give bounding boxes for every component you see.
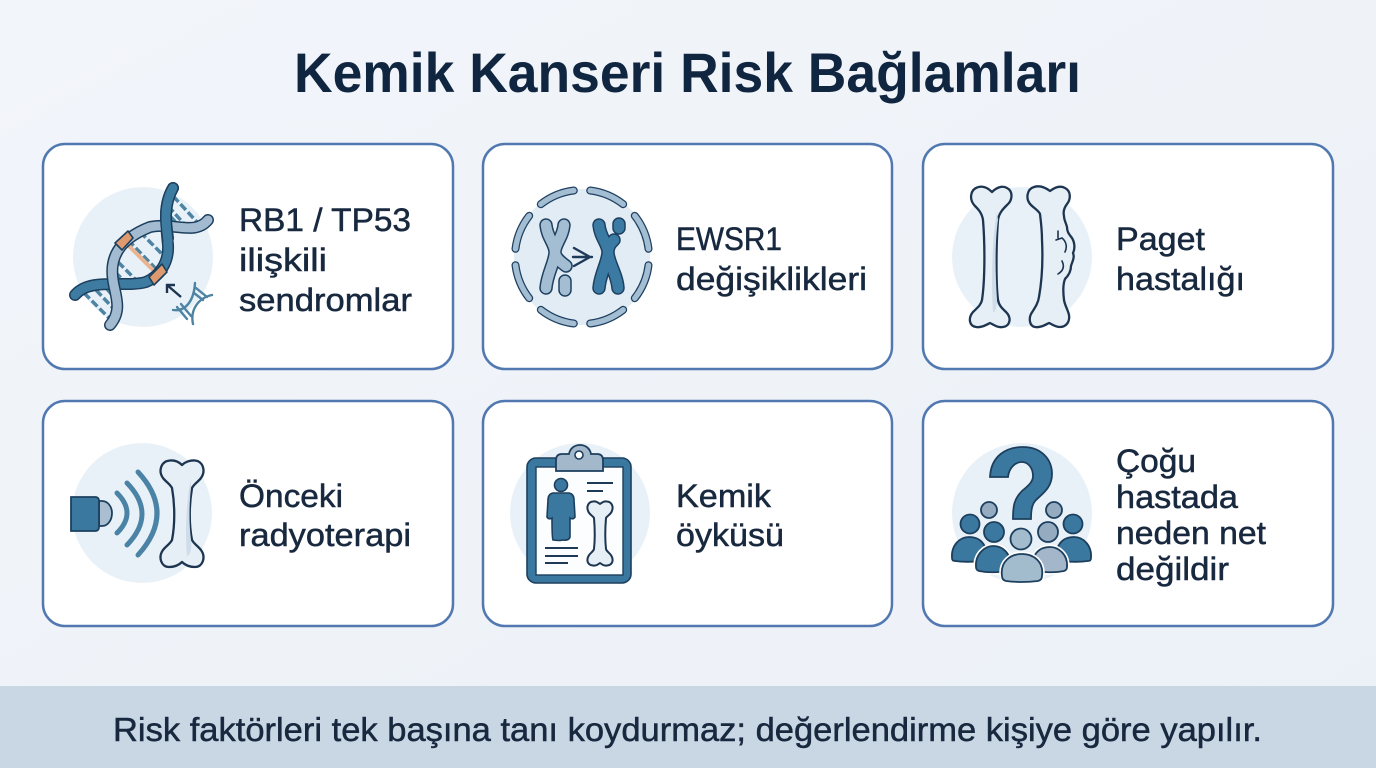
label: Paget: [1116, 221, 1205, 257]
icon: DNA helix: [73, 187, 213, 327]
panel: cause unclear in most patients: [923, 401, 1333, 626]
icon: clipboard: [510, 443, 650, 583]
label: hastada: [1116, 479, 1239, 515]
footer banner: Risk faktörleri tek başına tanı koydurmaz; değerlendirme kişiye göre yapılır.: [113, 711, 1262, 748]
label: Önceki: [239, 478, 343, 514]
label: Kemik: [676, 478, 772, 514]
label: [239, 478, 411, 553]
icon: radiation source and bone: [71, 443, 212, 583]
icon: question mark and people: [952, 443, 1092, 583]
small DNA: [173, 283, 212, 324]
label: sendromlar: [239, 282, 412, 318]
panel: EWSR1 changes: [483, 144, 892, 369]
icon: normal and Paget bones: [952, 186, 1092, 327]
label: ilişkili: [239, 242, 327, 278]
panel: prior radiotherapy: [43, 401, 453, 626]
orange gene segments: [115, 231, 167, 285]
label: öyküsü: [676, 517, 784, 553]
label: değişiklikleri: [676, 261, 867, 297]
label: [1116, 221, 1245, 297]
title: Kemik Kanseri Risk Bağlamları: [294, 41, 1081, 104]
label: değildir: [1116, 551, 1229, 587]
footer banner: [0, 686, 1376, 768]
label: radyoterapi: [239, 517, 411, 553]
panel: bone history: [483, 401, 892, 626]
label: Çoğu: [1116, 443, 1196, 479]
label: [676, 478, 784, 553]
label: [1116, 443, 1266, 587]
panel: Paget disease: [923, 144, 1333, 369]
label: neden net: [1116, 515, 1266, 551]
icon: chromosomes: [514, 189, 650, 325]
label: [239, 202, 412, 318]
small arrow: [167, 285, 181, 297]
label: EWSR1: [676, 221, 782, 257]
label: [676, 221, 867, 297]
label: hastalığı: [1116, 261, 1245, 297]
panel: RB1 / TP53 syndromes: [43, 144, 453, 369]
label: RB1 / TP53: [239, 202, 411, 238]
